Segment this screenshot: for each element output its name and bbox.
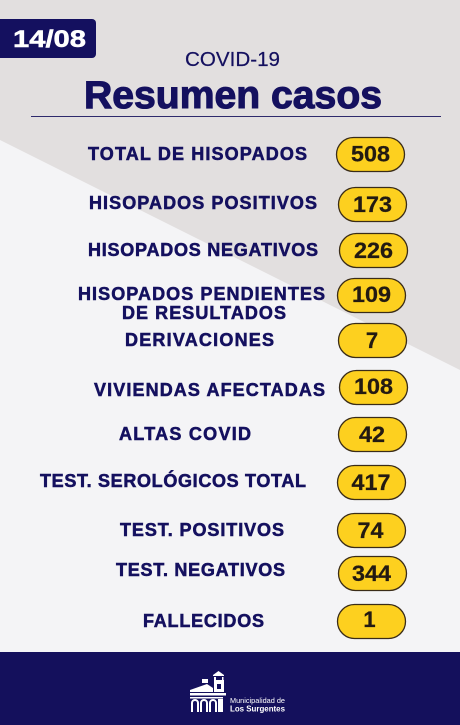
- icon: municipal building: [190, 671, 226, 712]
- row: test positivos: TEST. POSITIVOS: [120, 520, 284, 540]
- row: altas covid: ALTAS COVID: [119, 424, 251, 444]
- background: grey diagonal panel: [0, 0, 460, 370]
- row: viviendas afectadas: 108: [354, 374, 393, 399]
- row: hisopados positivos: [89, 188, 406, 222]
- row: altas covid: [119, 418, 406, 452]
- footer wordmark: [230, 696, 285, 714]
- row: test serologicos total: [40, 466, 406, 500]
- row: test serologicos total: 417: [352, 470, 390, 495]
- row: test negativos: TEST. NEGATIVOS: [116, 560, 285, 580]
- row: total de hisopados: 508: [351, 142, 390, 166]
- row: test positivos: [120, 514, 406, 548]
- row: derivaciones: DERIVACIONES: [125, 330, 274, 350]
- row: test negativos: [116, 556, 406, 590]
- row: hisopados negativos: [88, 234, 408, 268]
- row: fallecidos: FALLECIDOS: [143, 611, 264, 631]
- date badge: [0, 19, 96, 58]
- row: hisopados positivos: HISOPADOS POSITIVOS: [89, 193, 317, 213]
- row: test serologicos total: TEST. SEROLÓGICOS TOTAL: [40, 470, 306, 491]
- row: total de hisopados: TOTAL DE HISOPADOS: [88, 144, 307, 164]
- row: derivaciones: 7: [366, 328, 378, 353]
- title rule: [31, 116, 441, 117]
- date badge: 14/08: [13, 26, 86, 53]
- subtitle: COVID-19: [185, 49, 280, 71]
- row: viviendas afectadas: [94, 370, 408, 404]
- footer wordmark: Los Surgentes: [230, 704, 285, 714]
- footer band: [0, 652, 460, 725]
- row: hisopados negativos: HISOPADOS NEGATIVOS: [88, 240, 318, 260]
- row: fallecidos: [143, 604, 406, 638]
- row: test positivos: 74: [358, 518, 384, 543]
- row: viviendas afectadas: VIVIENDAS AFECTADAS: [94, 380, 325, 400]
- row: hisopados negativos: 226: [354, 238, 393, 263]
- row: fallecidos: 1: [363, 607, 376, 632]
- row: hisopados pendientes de resultados: [78, 278, 406, 323]
- row: altas covid: 42: [359, 422, 385, 447]
- footer wordmark: Municipalidad de: [230, 696, 285, 705]
- row: total de hisopados: [88, 138, 404, 172]
- title: Resumen casos: [84, 74, 382, 117]
- row: hisopados pendientes de resultados: HISOPADOS PENDIENTES: [78, 284, 325, 304]
- row: derivaciones: [125, 324, 406, 358]
- row: hisopados pendientes de resultados: 109: [352, 282, 391, 307]
- row: hisopados positivos: 173: [353, 192, 392, 217]
- row: test negativos: 344: [352, 561, 392, 586]
- row: hisopados pendientes de resultados: DE RESULTADOS: [122, 303, 286, 323]
